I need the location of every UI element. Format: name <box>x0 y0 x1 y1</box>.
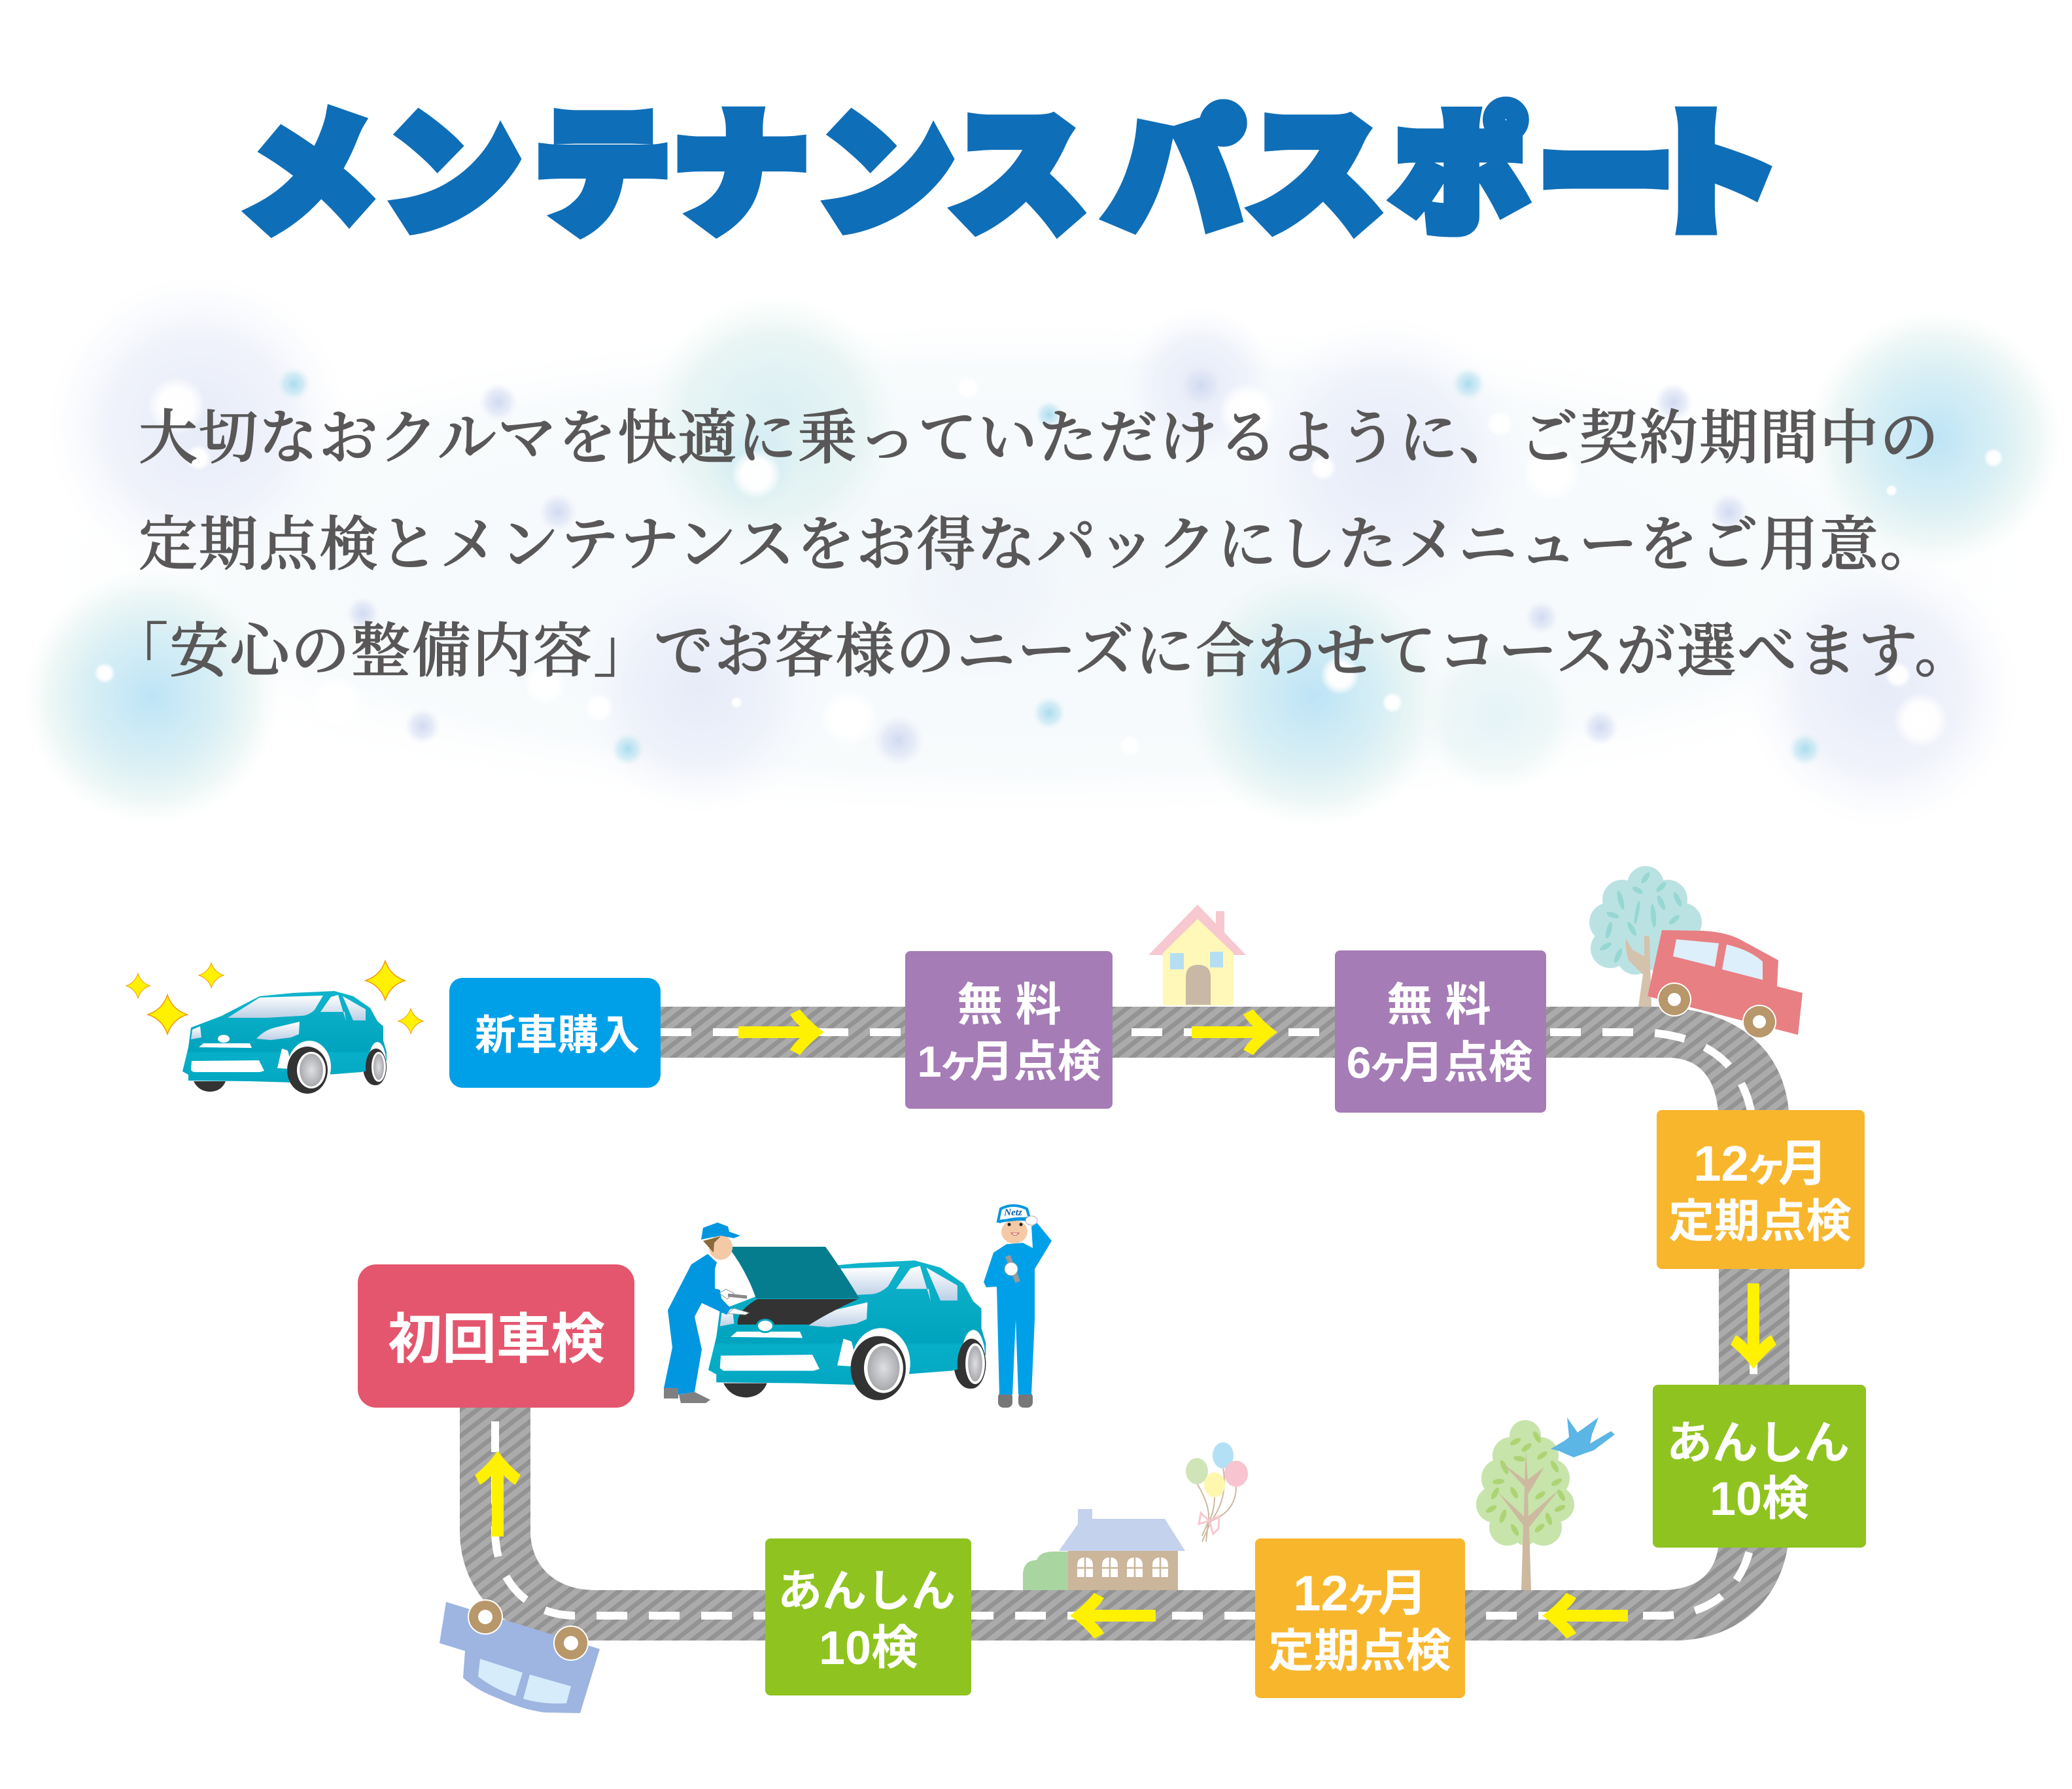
arrow: left 2 <box>1070 1593 1156 1639</box>
step: あんしん10検 right <box>1653 1385 1866 1548</box>
step: あんしん10検 bottom <box>765 1538 971 1695</box>
step: 12ヶ月定期点検 bottom <box>1255 1538 1465 1698</box>
icon: blue car upside down <box>440 1599 600 1713</box>
step: あんしん10検 bottom: あんしん <box>778 1567 956 1616</box>
step: 新車購入 <box>449 978 661 1088</box>
step: 12ヶ月定期点検 right: 定期点検 <box>1668 1196 1852 1247</box>
icon: mechanic at hood <box>664 1223 749 1403</box>
step: あんしん10検 right: あんしん <box>1666 1417 1850 1468</box>
icon: blue-green tree <box>1589 866 1702 1007</box>
arrow: right 2 <box>1192 1009 1277 1055</box>
step: 12ヶ月定期点検 bottom: 12ヶ月 <box>1293 1566 1428 1622</box>
step: あんしん10検 right: 10検 <box>1710 1473 1809 1525</box>
icon: blue roof house <box>1023 1509 1185 1590</box>
intro text <box>109 406 1973 684</box>
icon: sparkles <box>126 961 423 1034</box>
road <box>460 1007 1789 1641</box>
icon: yellow house <box>1148 905 1246 1005</box>
icon: green tree <box>1476 1420 1574 1590</box>
arrow: up <box>475 1451 521 1537</box>
icon: mechanic standing <box>984 1206 1052 1408</box>
icon: red car <box>1648 930 1803 1039</box>
step: 新車購入: 新車購入 <box>475 1013 640 1058</box>
step: 無料1ヶ月点検: 1ヶ月点検 <box>917 1037 1101 1086</box>
title: メンテナンスパスポート <box>242 100 1779 250</box>
icon: teal car with open hood <box>708 1247 986 1400</box>
step: 無料6ヶ月点検: 無 料 <box>1387 979 1491 1030</box>
icon: new teal car <box>182 991 387 1094</box>
step: 12ヶ月定期点検 right <box>1657 1110 1865 1269</box>
step: 無料1ヶ月点検: 無 料 <box>957 979 1062 1030</box>
step: 初回車検 <box>358 1264 634 1408</box>
panel: bokeh intro background <box>16 275 2062 827</box>
step: 無料1ヶ月点検 <box>905 951 1113 1109</box>
arrow: down <box>1731 1283 1776 1369</box>
intro text: 定期点検とメンテナンスをお得なパックにしたメニューをご用意。 <box>139 513 1939 578</box>
intro text: 「安心の整備内容」でお客様のニーズに合わせてコースが選べます。 <box>109 619 1973 684</box>
step: 12ヶ月定期点検 bottom: 定期点検 <box>1268 1625 1451 1676</box>
step: あんしん10検 bottom: 10検 <box>819 1622 918 1675</box>
step: 初回車検: 初回車検 <box>388 1309 605 1370</box>
arrow: left 1 <box>1542 1593 1628 1639</box>
icon: blue bird <box>1551 1417 1615 1457</box>
step: 12ヶ月定期点検 right: 12ヶ月 <box>1693 1136 1828 1192</box>
icon: mechanic standing: Netz <box>1003 1207 1022 1218</box>
step: 無料6ヶ月点検: 6ヶ月点検 <box>1347 1038 1532 1088</box>
step: 無料6ヶ月点検 <box>1335 950 1546 1113</box>
icon: balloons <box>1186 1442 1248 1542</box>
intro text: 大切なおクルマを快適に乗っていただけるように、ご契約期間中の <box>139 406 1939 471</box>
arrow: right 1 <box>738 1009 824 1055</box>
